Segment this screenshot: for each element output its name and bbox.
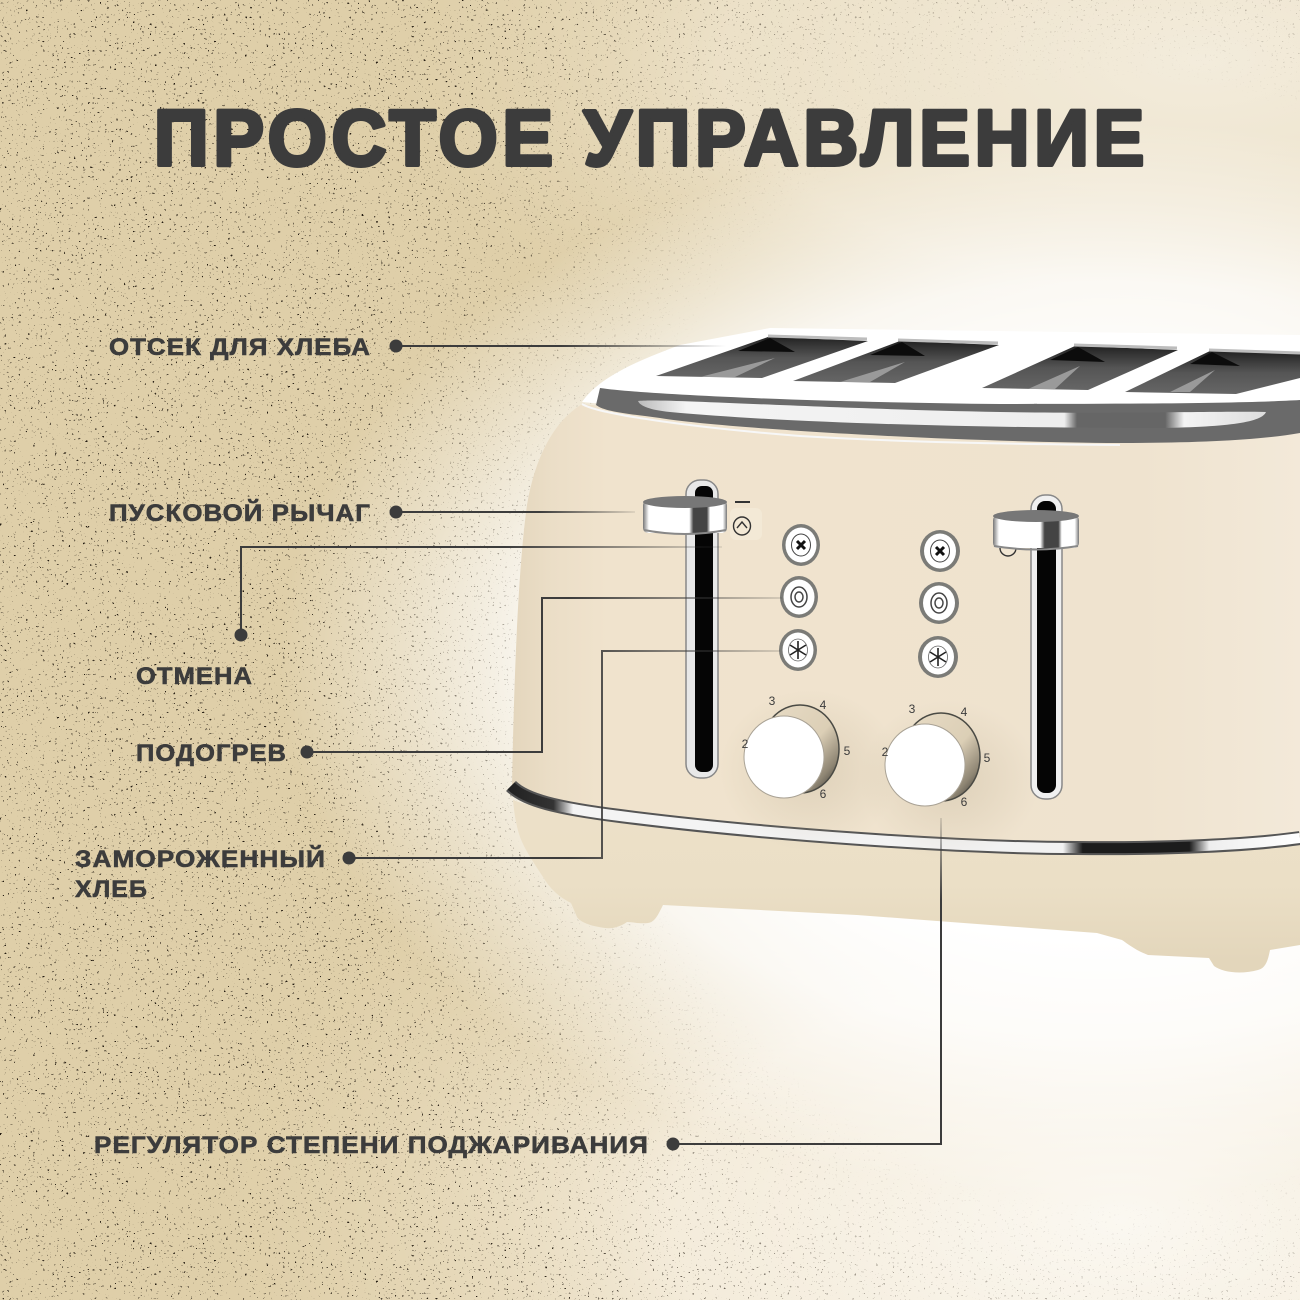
- callout: frozen bread: [75, 651, 780, 903]
- toaster top deck: [582, 328, 1300, 432]
- right lever knob: [993, 510, 1079, 550]
- callout: browning control: РЕГУЛЯТОР СТЕПЕНИ ПОДЖАРИВАНИЯ: [94, 1132, 649, 1159]
- frozen button right: [918, 636, 958, 678]
- right dial: 2: [882, 745, 889, 759]
- callout: frozen bread: ХЛЕБ: [75, 876, 148, 903]
- callout: reheat: [136, 598, 782, 767]
- left dial: 4: [820, 698, 827, 712]
- chrome top band: [582, 388, 1300, 445]
- buttons left: [779, 524, 820, 671]
- cancel button: [782, 524, 820, 566]
- callout: cancel: [136, 547, 722, 690]
- toaster: [511, 328, 1300, 973]
- callout: start lever: [109, 499, 635, 527]
- left lever symbols: [730, 502, 762, 540]
- toaster body: [512, 404, 1300, 852]
- left dial: 2: [742, 737, 749, 751]
- frozen button: [779, 629, 817, 671]
- left dial: 5: [844, 744, 851, 758]
- right dial: 6: [961, 795, 968, 809]
- left dial: [742, 694, 851, 801]
- right lever track: [1031, 495, 1062, 799]
- reheat button: [780, 576, 818, 618]
- right lever symbol: [1000, 540, 1016, 556]
- slot 2: [793, 340, 999, 383]
- bread slots: [656, 336, 1300, 394]
- callout: start lever: ПУСКОВОЙ РЫЧАГ: [109, 499, 371, 527]
- slot 3: [982, 345, 1178, 390]
- left dial: 6: [820, 787, 827, 801]
- cancel button right: [920, 530, 960, 572]
- right dial: 3: [909, 702, 916, 716]
- left dial: 3: [769, 694, 776, 708]
- callout: bread slot: [109, 334, 726, 361]
- soft shadows on body: [720, 690, 900, 850]
- buttons right: [918, 530, 960, 678]
- right dial: [882, 702, 991, 809]
- callout: bread slot: ОТСЕК ДЛЯ ХЛЕБА: [109, 334, 371, 361]
- right dial: 5: [984, 751, 991, 765]
- left lever knob: [643, 496, 727, 534]
- title: ПРОСТОЕ УПРАВЛЕНИЕ: [154, 93, 1149, 182]
- callout: browning control: [94, 818, 941, 1159]
- right dial: 4: [961, 705, 968, 719]
- callout: cancel: ОТМЕНА: [136, 663, 253, 690]
- slot 1: [656, 336, 868, 378]
- toaster base: [513, 800, 1300, 973]
- left lever track: [686, 480, 718, 778]
- chrome strip: [511, 786, 1300, 848]
- callout: reheat: ПОДОГРЕВ: [136, 740, 287, 767]
- callout: frozen bread: ЗАМОРОЖЕННЫЙ: [75, 845, 326, 873]
- slot 4: [1125, 350, 1300, 394]
- reheat button right: [919, 582, 959, 624]
